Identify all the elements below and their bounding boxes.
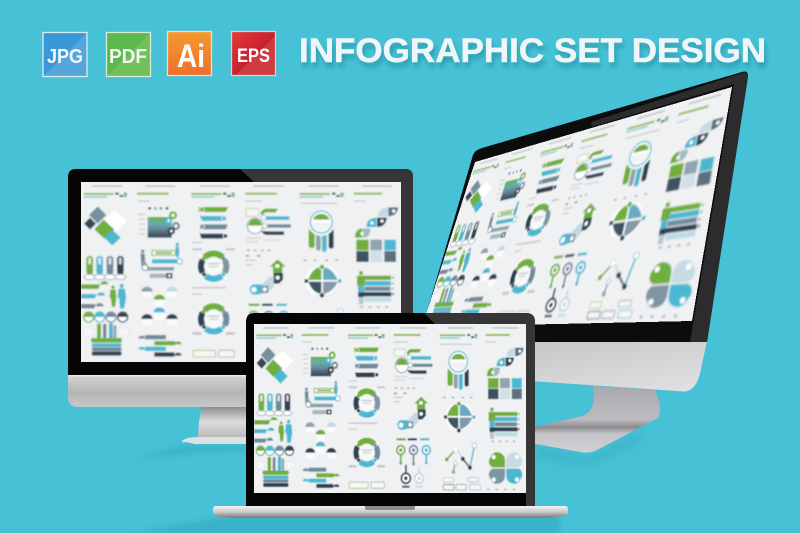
stand: right monitor (530, 386, 660, 453)
base: laptop (213, 506, 568, 518)
screen: left monitor (77, 179, 405, 365)
stand: left monitor (198, 407, 250, 439)
chin highlight: left monitor (68, 375, 413, 376)
bezel: left monitor (68, 169, 413, 376)
screen: right monitor (426, 87, 732, 324)
icon: JPG (43, 32, 87, 76)
icon: EPS (232, 32, 276, 76)
icon: PDF (106, 32, 150, 76)
chin: right monitor (420, 341, 707, 392)
title shadow: INFOGRAPHIC SET DESIGN (301, 37, 768, 75)
lid reflection: laptop (424, 313, 535, 507)
bezel: right monitor (418, 72, 748, 342)
stand foot: left monitor (182, 437, 250, 444)
bezel reflection: left monitor (240, 169, 413, 376)
icon: EPS: EPS (237, 46, 270, 67)
notch: laptop (365, 506, 415, 510)
icon: Ai (168, 32, 212, 76)
chin: left monitor (68, 375, 413, 407)
screen: laptop (251, 321, 530, 496)
icon: PDF: PDF (109, 45, 147, 68)
bezel reflection: right monitor (591, 72, 748, 342)
lid: laptop (246, 313, 535, 507)
icon: JPG: JPG (47, 45, 83, 68)
icon: Ai: Ai (177, 38, 205, 74)
title: INFOGRAPHIC SET DESIGN (299, 32, 766, 70)
